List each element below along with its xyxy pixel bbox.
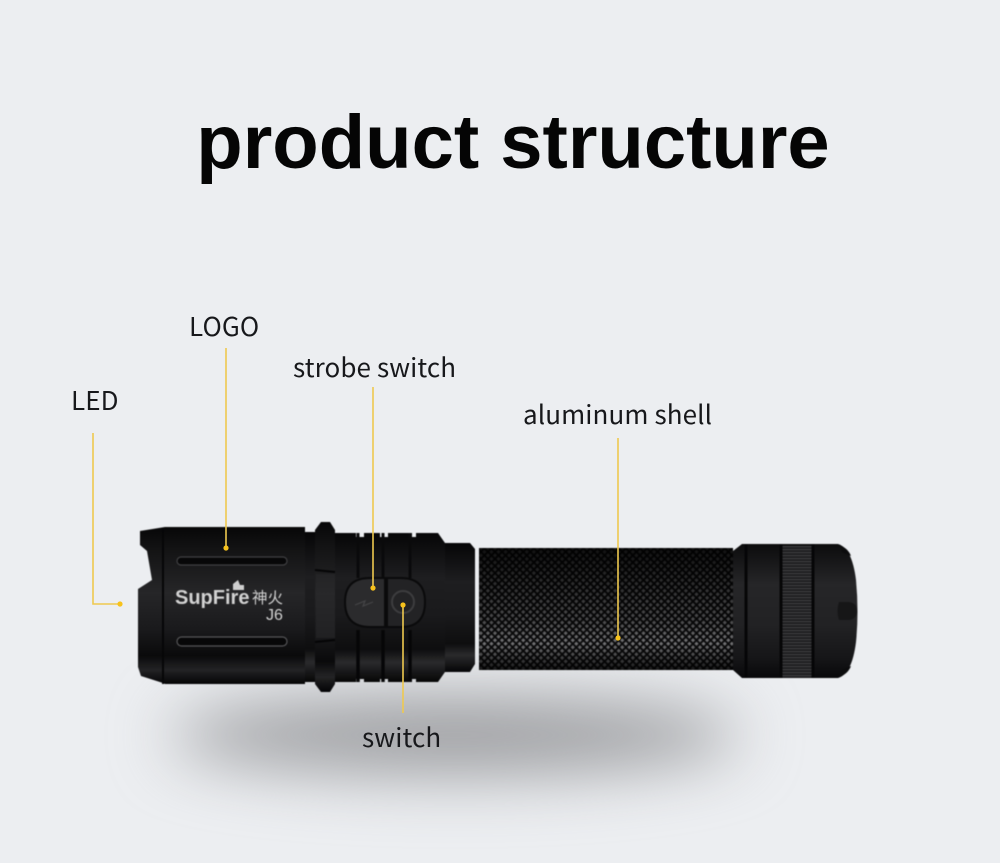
flashlight neck [443, 543, 475, 672]
callout: LED [71, 381, 123, 607]
flashlight head: 神火 [252, 586, 283, 608]
callout: switch: switch [362, 718, 441, 755]
callout: strobe switch: strobe switch [293, 348, 456, 385]
callout: LOGO [189, 307, 259, 551]
flashlight [138, 522, 858, 692]
flashlight switch body [335, 533, 445, 682]
callout: LED: LED [71, 381, 119, 418]
callout: aluminum shell [523, 395, 712, 641]
flashlight head [138, 527, 305, 684]
flashlight collar ring [305, 522, 335, 692]
callout: switch [362, 602, 441, 755]
callout: LOGO: LOGO [189, 307, 259, 344]
flashlight knurled aluminum grip [479, 548, 733, 670]
callout: aluminum shell: aluminum shell [523, 395, 712, 432]
model mark: J6 [266, 607, 283, 624]
flashlight switch buttons [345, 578, 425, 627]
ground shadow [170, 697, 740, 773]
flashlight tail cap [733, 544, 858, 678]
head grooves [177, 557, 287, 565]
brand logo: SupFire [175, 587, 249, 609]
title: product structure [196, 100, 830, 185]
callout: strobe switch [293, 348, 456, 591]
